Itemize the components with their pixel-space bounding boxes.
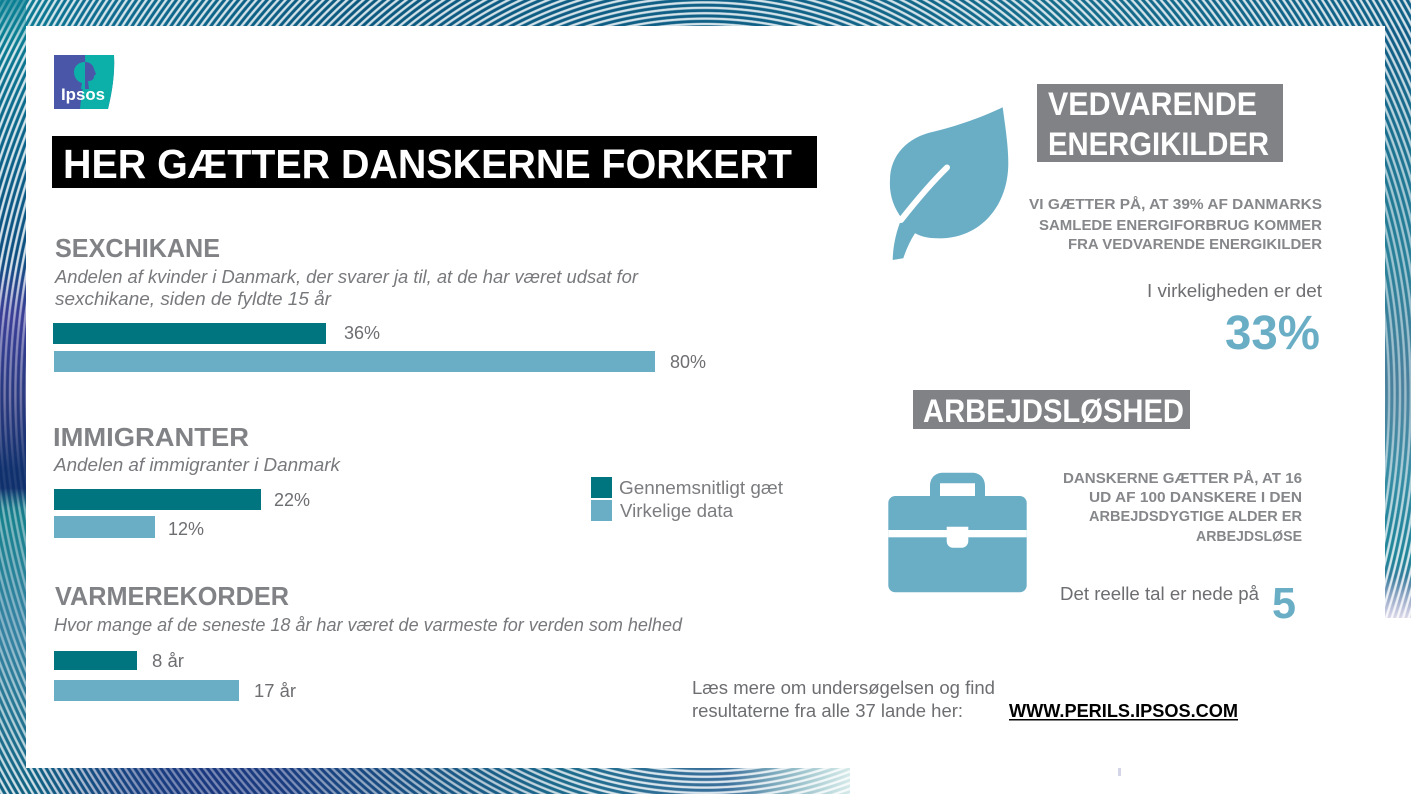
heading: varmerekorder: VARMEREKORDER [55,581,289,611]
bar: guess 22% [54,489,310,510]
text: energy reality: I virkeligheden er det [1147,281,1322,301]
text: unemployment guess: DANSKERNE GÆTTER PÅ, AT 16 [1063,470,1302,487]
bar: guess 36% [53,323,380,344]
icon: briefcase [888,473,1027,592]
bar: actual 12%: 12% [168,519,204,539]
text: energy guess [1029,196,1323,253]
heading: arbejdsløshed: ARBEJDSLØSHED [923,393,1184,429]
bar: actual 17 år: 17 år [254,681,296,701]
text: read more: resultaterne fra alle 37 lande her: [692,701,963,721]
bar: actual 17 år [54,680,296,701]
text: energy reality: 33% [1225,307,1320,360]
legend [591,477,783,521]
bar: guess 22%: 22% [274,490,310,510]
description: sexchikane [54,267,639,309]
bar: actual 80% [54,351,706,372]
bar: actual 80%: 80% [670,352,706,372]
text: energy guess: SAMLEDE ENERGIFORBRUG KOMMER [1039,218,1323,234]
heading: sexchikane: SEXCHIKANE [55,233,220,263]
title: HER GÆTTER DANSKERNE FORKERT [63,141,792,187]
heading: vedvarende energikilder: VEDVARENDE [1048,86,1257,122]
Ipsos logo: Ipsos [61,85,105,104]
text: unemployment guess: ARBEJDSLØSE [1196,529,1302,545]
heading: immigranter: IMMIGRANTER [53,422,249,452]
section: sexchikane [53,233,706,372]
legend: Gennemsnitligt gæt [619,478,783,498]
text: energy guess: FRA VEDVARENDE ENERGIKILDER [1068,237,1323,253]
heading: vedvarende energikilder: ENERGIKILDER [1048,126,1269,162]
bar: actual 12% [54,516,204,539]
link text: WWW.PERILS.IPSOS.COM [1009,701,1238,721]
description: sexchikane: Andelen af kvinder i Danmark, der svarer ja til, at de har været udsat for [54,267,639,287]
text: unemployment reality: Det reelle tal er nede på [1060,584,1260,604]
text: read more [692,678,995,721]
heading: vedvarende energikilder [1037,84,1283,162]
text: unemployment reality: 5 [1272,579,1296,628]
section: immigranter [53,422,341,539]
section: varmerekorder [54,581,683,701]
text: energy guess: VI GÆTTER PÅ, AT 39% AF DANMARKS [1029,196,1322,213]
icon: leaf [890,107,1008,260]
bar: guess 8 år [54,651,184,671]
text: read more: Læs mere om undersøgelsen og find [692,678,995,698]
description: varmerekorder: Hvor mange af de seneste 18 år har været de varmeste for verden som helhed [54,615,683,635]
description: immigranter: Andelen af immigranter i Danmark [53,455,341,475]
legend: Virkelige data [620,501,734,521]
bar: guess 8 år: 8 år [152,651,184,671]
bar: guess 36%: 36% [344,323,380,343]
text: unemployment guess: ARBEJDSDYGTIGE ALDER ER [1089,509,1303,525]
text: unemployment guess [1063,470,1303,545]
text: unemployment guess: UD AF 100 DANSKERE I DEN [1089,490,1302,506]
description: sexchikane: sexchikane, siden de fyldte 15 år [55,289,332,309]
text: unemployment reality [1060,579,1296,628]
Ipsos logo [54,55,114,109]
text: energy reality [1147,281,1322,360]
